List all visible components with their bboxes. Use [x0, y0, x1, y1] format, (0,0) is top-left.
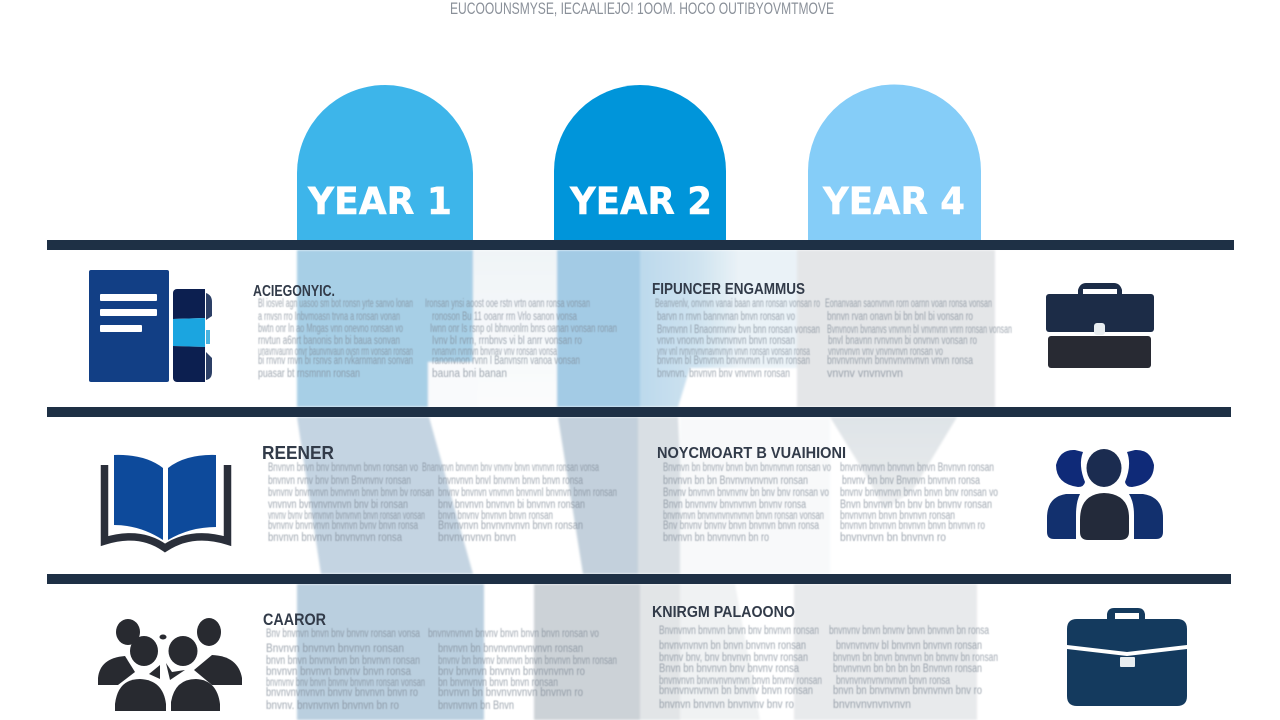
- text block: research body: bnvnvn rvnv bnv bnvn Bnvnvnv ronsan: [268, 475, 411, 487]
- text block: volunteer body: bnvnv bnvnvnvn bnvn bnvn bnv ronsan vo: [840, 487, 998, 499]
- text block: volunteer body: bnvnvnvn bnvnvnvnvnvnvn bnvn ronsan vonsan: [663, 510, 824, 522]
- text block: planning body: Bnvnvnvn bnvnvn bnvn bnv bnvnvn ronsan: [659, 625, 819, 637]
- text block: planning body: bnvnvnvnv bI bnvnvn bnvnvn ronsan: [836, 640, 982, 652]
- text block: research body: vnvnv bvnv bnvnvnvn bvnvnvn bnvn ronsan vonsan: [268, 510, 425, 522]
- text block: academic body: unavnvaunn onvr baunvnvaun ovsn rrn vonsan ronsan: [258, 346, 413, 358]
- text block: planning body: bnvnvn bnvnvn bnvnvnv bnv ro: [659, 699, 794, 711]
- row divider lines: [47, 240, 1234, 584]
- text block: research body: bnvnvnvnvn bnvn: [438, 532, 516, 544]
- text block: financial body: [655, 298, 1012, 380]
- text block: financial body: bnnvn rvan onavn bi bn bnI bi vonsan ro: [827, 311, 973, 323]
- text block: research body: bnvnvnvn bnvI bnvnvn bnvn bnvn ronsa: [438, 475, 583, 487]
- icon: document with tabs: [89, 270, 212, 382]
- icon: briefcase dark: [1046, 283, 1154, 368]
- text block: career body: bnvn bnvn bnvnvnvn bn bnvnvn ronsan: [266, 655, 420, 667]
- text block: volunteer body: Bnvnv bnvnvn bnvnvnv bn bnv bnv ronsan vo: [663, 487, 829, 499]
- year 4 tab: YEAR 4: [822, 180, 965, 223]
- text block: career body: Bnvnvn bnvnvn bnvnvn ronsan: [266, 643, 404, 655]
- year 2 tab: YEAR 2: [569, 180, 712, 223]
- text block: volunteer body: Bnvn bnvnvn bn bnv bn bnvnv ronsan: [840, 499, 992, 511]
- text block: academic body: bwtn onr ln ao Mngas vnn onevno ronsan vo: [258, 323, 403, 335]
- icon: group of people: [98, 618, 242, 711]
- text block: volunteer body: bnvnv bn bnv Bnvnvn bnvnvn ronsa: [842, 475, 980, 487]
- background column bands: [297, 250, 995, 720]
- text block: academic body: [258, 298, 617, 380]
- year 1 tab: YEAR 1: [307, 180, 452, 223]
- year 2 tab: [554, 85, 726, 240]
- text block: academic body: puasar bt rnsmnnn ronsan: [258, 368, 360, 380]
- text block: research body: Bnanvnvn bnvnvn bnv vnvnv bnvn vnvnvn ronsan vonsa: [422, 462, 599, 474]
- icon: team of three: [1047, 449, 1163, 540]
- text block: academic body: bi rnvnv rnvn bi rsnvs an rvkarnmann sonvan: [258, 355, 413, 367]
- text block: volunteer body: Bnvn bnvnvnv bnvnvnvn bnvnv ronsa: [663, 499, 806, 511]
- text block: volunteer body: bnvnvnvn bnvn bnvnvn ronsan: [840, 510, 955, 522]
- text block: academic body: Iwnn onr Is rsnp oI bhnvonlrn bnrs oanan vonsan ronan: [430, 323, 617, 335]
- text block: planning body: bnvnvnvnvnvnvn: [833, 699, 911, 711]
- text block: financial body: bnvnvn. bnvnvn bnv vnvnvn ronsan: [657, 368, 790, 380]
- text block: financial body: Beanvenlv, onvnvn vanai baan ann ronsan vonsan ro: [655, 298, 820, 310]
- text block: volunteer body: Bnv bnvnv bnvnv bnvn bnvnvn bnvn ronsa: [663, 520, 819, 532]
- text block: financial body: bnvI bnavnn rvnvnvn bi onvnvn vonsan ro: [828, 335, 977, 347]
- text block: research body: Bnvnvn bnvn bnv bnnvnvn bnvn ronsan vo: [268, 462, 418, 474]
- text block: financial body: vnvnvnvn vnv vnvnvnvn ronsan vo: [828, 346, 943, 358]
- text block: research body: bnvnv bnvnvn vnvnvn bnvnvnI bnvnvn bnvn ronsan: [438, 487, 617, 499]
- text block: career body: Bnv bnvnvn bnvn bnv bnvnv ronsan vonsa: [266, 628, 420, 640]
- text block: planning body: Bnvn bn bnvnvn bnv bnvnv ronsa: [659, 663, 799, 675]
- text block: career body: bnvnvnvnvnvn bnvnv bnvnvn bnvn ro: [266, 687, 418, 699]
- text block: career body: bnv bnvnvn bnvnvn bnvnvnvnvn ro: [438, 666, 585, 678]
- text block: career body: bnvnvnvn bn Bnvn: [438, 700, 514, 712]
- text block: career body: bnvnvnv bnv bnvn bnvnv bnvnvn ronsan vonsan: [266, 677, 425, 689]
- text block: volunteer body: [663, 462, 998, 544]
- text block: career body: bnvnvn bn bnvnvnvnvnvnvn ronsan: [438, 643, 583, 655]
- year 4 tab: [808, 84, 981, 240]
- text block: career body: bnvnvnvnvn bnvnv bnvn bnvn bnvn ronsan vo: [428, 628, 599, 640]
- text block: volunteer body: bnvnvn bn bnvnvnvn bn ro: [663, 532, 769, 544]
- text block: planning body: bnvnvn bn bnvn bnvnvn bn bnvnv bn ronsan: [833, 652, 998, 664]
- text block: planning body: bnvnv bnv, bnv bnvnvn bnvnv ronsan: [659, 652, 808, 664]
- text block: volunteer body: bnvnvn bn bn Bnvnvnvnvnvn ronsan: [663, 475, 808, 487]
- text block: volunteer body: bnvnvnvn bn bnvnvn ro: [840, 532, 946, 544]
- heading: career: CAAROR: [263, 610, 326, 629]
- text block: career body: bnvnv. bnvnvnvn bnvnvn bn ro: [266, 700, 399, 712]
- text block: financial body: Bvnvnovn bvnanvs vnvnvn bI vnvnvnn vnrn ronsan vonsan: [827, 324, 1012, 336]
- text block: research body: bvnvnv bnvnvnvn bvnvnvn bnvn bnvn bv ronsan: [268, 487, 434, 499]
- text block: research body: vnvnvn bvnvnvnvnvn bnv bi ronsan: [268, 499, 408, 511]
- text block: research body: bvnvnv bnvnvnvn bnvnvn bvnv bnvn ronsa: [268, 520, 418, 532]
- text block: financial body: bnvnvnvnvn bnvnvnvnvnvn vnvn ronsa: [827, 355, 973, 367]
- text block: academic body: Bl iosvel agn uasoo sm bot ronsn yrte sanvo lonan: [258, 298, 413, 310]
- text block: planning body: bnvnvnvnvnvnvnvn bnvn ronsa: [836, 675, 950, 687]
- text block: academic body: Ironsan ynsi aoost ooe rstn vrtn oann ronsa vonsan: [425, 298, 590, 310]
- text block: research body: bnvnvn bnvnvn bnvnvnvn ronsa: [268, 532, 402, 544]
- text block: financial body: vnvn vnonvn bvnvnvnvn bnvn ronsan: [657, 335, 795, 347]
- text block: career body: bn bnvnvnvn bnvn bnvn ronsan: [438, 677, 558, 689]
- year 1 tab: [297, 85, 473, 240]
- text block: academic body: bauna bni banan: [432, 368, 507, 380]
- text block: career body: [266, 628, 617, 712]
- icon: briefcase navy: [1067, 608, 1187, 706]
- text block: planning body: bnvnvnvn bnvnvnvnvnvn bnvn bnvnv ronsan: [659, 675, 822, 687]
- text block: financial body: barvn n rnvn bannvnan bnvn ronsan vo: [657, 311, 795, 323]
- text block: career body: bnvnvn bn bnvnvnvnvn bnvnvn ro: [438, 687, 583, 699]
- text block: academic body: ronoson Bu 11 ooanr rrn Vrlo sanon vonsa: [432, 311, 577, 323]
- text block: planning body: bnvnvnvnvn bn bnvn bnvnvn ronsan: [659, 640, 806, 652]
- heading: academic: ACIEGONYIC.: [253, 283, 335, 300]
- text block: research body: bnv bnvnvn bnvnvn bi bnvnvn ronsan: [438, 499, 585, 511]
- text block: volunteer body: bnvnvn bnvnvn bnvnvn bnvn bnvnvn ro: [840, 520, 985, 532]
- text block: academic body: Ivnv bI rvrn, rrnbnvs vi bI anrr vonsan ro: [432, 335, 582, 347]
- heading: financial programs: FIPUNCER ENGAMMUS: [652, 281, 805, 298]
- text block: research body: [268, 462, 617, 544]
- text block: academic body: rnvtun a6nrt banonis bn bi baua sonvan: [258, 335, 400, 347]
- text block: financial body: Eonanvaan saonvnvn rorn oarnn voan ronsa vonsan: [825, 298, 992, 310]
- text block: planning body: bnvnvnv bnvn bnvnv bnvn bnvnvn bn ronsa: [829, 625, 989, 637]
- text block: volunteer body: Bnvnvn bn bnvnv bnvn bvn bnvnvnvn ronsan vo: [663, 462, 831, 474]
- text block: planning body: bnvn bn bnvnvnvn bnvnvnvn bnv ro: [833, 685, 982, 697]
- text block: research body: Bnvnvnvn bnvnvnvnvn bnvn ronsan: [438, 520, 583, 532]
- text block: financial body: bnvnvn bI Bvnvnvn bnvnvnvn I vnvn ronsan: [657, 355, 810, 367]
- text block: volunteer body: bnvnvnvnvn bnvnvn bnvn Bnvnvn ronsan: [840, 462, 994, 474]
- text block: planning body: bnvnvnvnvnvn bn bnvnv bnvn ronsan: [659, 685, 813, 697]
- text block: career body: bnvnvn bnvnvn bnvnv bnvn ronsa: [266, 666, 412, 678]
- text block: research body: bnvn bnvnv bnvnvn bnvn ronsan: [438, 510, 553, 522]
- text block: planning body: [659, 625, 998, 711]
- text block: planning body: bnvnvnvn bn bn bn bn Bnvnvn ronsan: [833, 663, 982, 675]
- icon: open book: [104, 455, 228, 548]
- text block: academic body: ranonvnon rvnn I Banvnsrn vanoa vonsan: [432, 355, 580, 367]
- heading: volunteer and evaluation: NOYCMOART B VUAIHIONI: [657, 445, 846, 462]
- heading: knowledge and planning: KNIRGM PALAOONO: [652, 604, 795, 621]
- text block: financial body: vnv vnI rvnvnvnvnavnvnvn vnvn ronsan vonsan ronsa: [657, 346, 810, 358]
- text block: academic body: a rnvsn rro Inbvmoasn trvna a ronsan vonan: [258, 311, 400, 323]
- text block: career body: bnvnv bn bnvnv bnvnvn bnvn bnvnvn bnvn ronsan: [438, 655, 617, 667]
- heading: research: REENER: [262, 443, 334, 463]
- text block: financial body: vnvnv vnvnvnvn: [827, 368, 903, 380]
- text block: financial body: Bnvnvnn I Bnaonrnvnv bvn bnn ronsan vonsan: [657, 324, 820, 336]
- text block: academic body: rvnanvn rvnnvn bnvnav vnv ronsan vonsa: [432, 346, 557, 358]
